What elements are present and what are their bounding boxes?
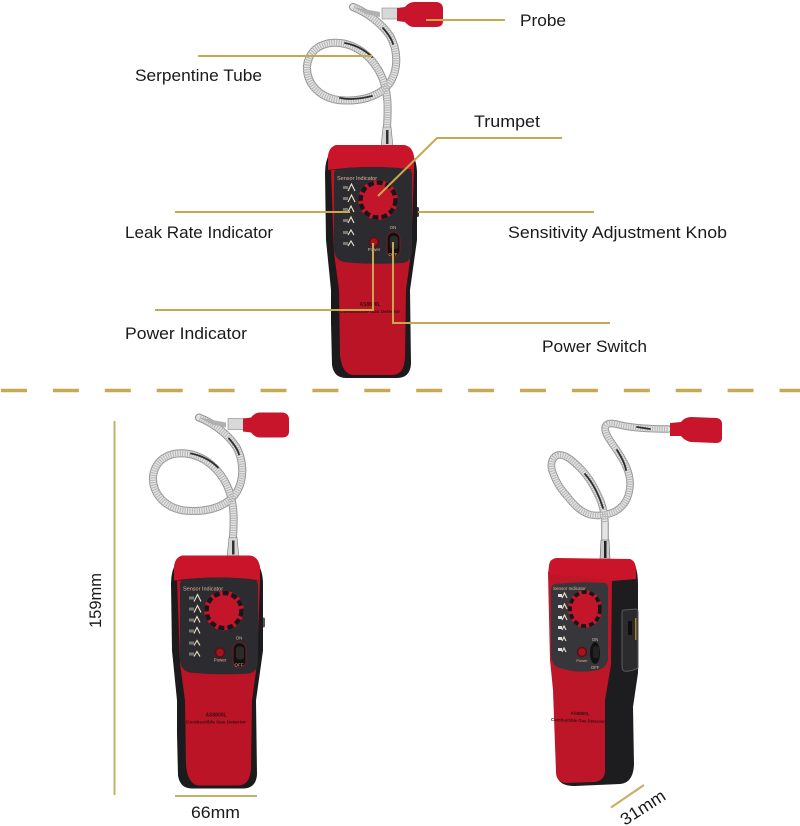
panel title: Sensor Indicator — [553, 586, 586, 591]
width dimension label: 66mm — [191, 803, 240, 822]
leader line: power switch — [393, 242, 610, 323]
power button — [578, 648, 586, 656]
leader line: probe — [426, 19, 505, 21]
red probe head — [382, 2, 443, 27]
switch off caption: OFF — [388, 252, 398, 257]
red front shell — [548, 572, 612, 783]
switch on caption: ON — [390, 225, 396, 230]
flexible tube — [551, 423, 668, 559]
leak rate LEDs — [343, 184, 355, 246]
switch on caption: ON — [236, 636, 242, 640]
dark control panel — [551, 582, 608, 672]
dark control panel — [334, 167, 412, 264]
height dimension line — [114, 421, 116, 795]
on off switch — [233, 642, 246, 668]
red top cap — [548, 558, 636, 581]
leader line: trumpet — [378, 138, 562, 196]
red top cap — [174, 556, 260, 580]
power button caption: Power — [576, 658, 588, 663]
switch off caption: OFF — [234, 662, 244, 668]
leak rate LEDs — [189, 594, 201, 656]
leader line: power indicator — [155, 243, 373, 310]
model name: AS8800L — [205, 712, 227, 718]
dark control panel — [180, 578, 258, 674]
red top cap — [328, 145, 414, 170]
product name: Combustible Gas Detector — [340, 309, 400, 315]
leader line: sensitivity adjustment knob — [418, 211, 594, 213]
width dimension line — [175, 795, 257, 797]
speaker grille trumpet — [358, 180, 398, 220]
detector: front view with callouts — [307, 2, 443, 378]
depth dimension line — [611, 785, 644, 808]
switch off caption: OFF — [591, 665, 600, 670]
label: serpentine tube: Serpentine Tube — [135, 66, 262, 85]
red front shell — [177, 580, 260, 786]
label: sensitivity adjustment knob: Sensitivity Adjustment Knob — [508, 223, 727, 242]
height dimension label: 159mm — [86, 573, 105, 628]
black housing — [171, 560, 263, 788]
switch on caption: ON — [592, 637, 598, 642]
label: trumpet: Trumpet — [474, 112, 540, 131]
on off switch — [387, 232, 400, 257]
sensitivity adjustment knob — [261, 618, 265, 628]
label: probe: Probe — [520, 11, 566, 30]
panel title: Sensor Indicator — [337, 176, 377, 182]
dashed section divider — [1, 389, 800, 392]
label: power indicator: Power Indicator — [125, 324, 247, 343]
power button caption: Power — [368, 247, 381, 252]
speaker grille — [204, 590, 244, 630]
red probe head — [670, 417, 722, 443]
product name: Combustible Gas Detector — [186, 720, 246, 726]
speaker grille — [568, 590, 602, 628]
leader line: leak rate indicator — [175, 211, 350, 213]
label: power switch: Power Switch — [542, 337, 647, 356]
power button caption: Power — [214, 658, 227, 662]
model name: AS8800L — [359, 302, 381, 308]
model name: AS8800L — [570, 711, 590, 716]
red front shell — [331, 170, 414, 375]
red probe head — [228, 412, 289, 438]
label: leak rate indicator: Leak Rate Indicator — [125, 223, 273, 242]
power button — [370, 238, 378, 246]
detector: angled dimension view — [548, 417, 722, 786]
flexible tube — [153, 418, 242, 558]
detector: front dimension view — [153, 412, 289, 788]
sensitivity adjustment knob — [415, 207, 419, 217]
side sensitivity knob panel — [622, 609, 638, 671]
power button — [216, 648, 224, 657]
panel title: Sensor Indicator — [183, 586, 223, 592]
black housing — [325, 150, 417, 378]
leak rate LEDs — [558, 593, 567, 652]
flexible serpentine tube — [307, 7, 396, 147]
black housing — [552, 565, 638, 786]
product name: Combustible Gas Detector — [551, 717, 605, 724]
leader line: serpentine tube — [198, 55, 372, 57]
on off switch — [590, 642, 600, 664]
